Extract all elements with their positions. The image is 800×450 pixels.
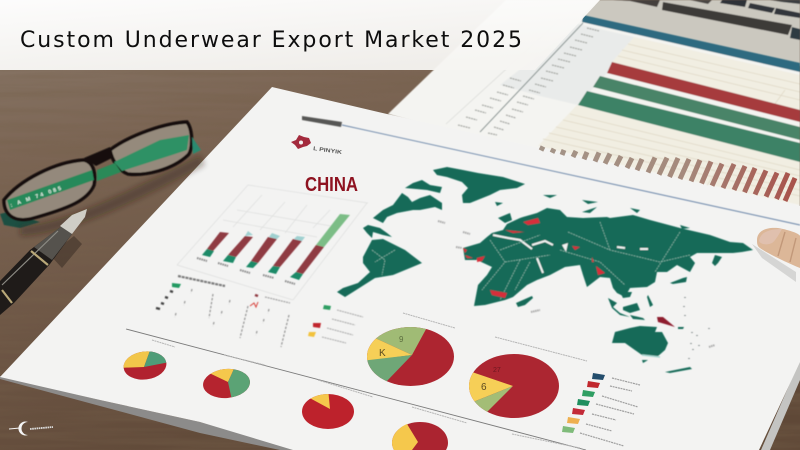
New Zealand <box>665 367 692 373</box>
section divider <box>126 329 586 450</box>
Arctic Canada <box>405 180 442 193</box>
pie captions <box>152 313 587 448</box>
company logo <box>291 135 342 156</box>
glasses <box>0 122 205 236</box>
title banner <box>0 0 600 70</box>
New Guinea highlight <box>657 317 675 327</box>
left lens <box>4 160 95 220</box>
hand: thumb holding page <box>752 228 800 282</box>
green bar upper <box>593 76 800 140</box>
row labels column <box>446 20 599 135</box>
Pacific islets <box>684 297 709 359</box>
pie chart F <box>469 354 559 418</box>
Eurasia and Africa <box>463 208 753 306</box>
data table <box>156 276 290 347</box>
slanted column chart <box>541 146 795 201</box>
pie chart A <box>124 351 166 380</box>
temple lettering: : A M 74 085 <box>10 185 64 209</box>
spreadsheet rule lines <box>543 44 800 196</box>
bridge <box>84 147 112 166</box>
heading: CHINA: CHINA <box>305 174 358 196</box>
bar 1 <box>202 232 229 257</box>
world map <box>337 167 753 373</box>
inland seas <box>493 235 648 273</box>
back sheet: spreadsheet report <box>388 0 800 230</box>
pie chart E: K <box>379 348 386 359</box>
front sheet shadow and page stack <box>0 360 800 450</box>
country borders <box>372 222 690 300</box>
green bar lower <box>578 91 800 162</box>
pie chart B <box>203 368 250 398</box>
company logo: L PINYIK <box>313 146 342 156</box>
pie legend <box>562 373 640 446</box>
red bar <box>607 62 800 122</box>
glasses shadow <box>20 155 205 236</box>
pen <box>0 209 87 315</box>
pie chart E: 9 <box>399 335 404 344</box>
title: Custom Underwear Export Market 2025 <box>20 28 522 53</box>
right lens <box>110 122 192 174</box>
pie chart F: 27 <box>493 367 501 374</box>
North America <box>373 193 442 223</box>
laptop keyboard <box>582 0 800 66</box>
highlighted export regions <box>463 218 605 298</box>
Australia <box>612 326 668 357</box>
islands <box>495 195 722 329</box>
green temple arm <box>7 170 94 210</box>
pie chart D <box>392 422 448 450</box>
watermark logo <box>9 422 53 436</box>
bar 5 <box>290 214 350 280</box>
Greenland <box>433 167 525 203</box>
pie chart E <box>367 327 454 386</box>
report header rule <box>302 116 800 225</box>
stacked bar chart <box>177 185 368 300</box>
map legend <box>308 305 363 343</box>
pie chart F: 6 <box>481 382 487 393</box>
bar axis labels <box>197 258 295 284</box>
bar 4 <box>268 236 305 274</box>
teal table header <box>582 15 800 72</box>
bar 2 <box>223 231 253 263</box>
South America <box>337 239 422 297</box>
Central America <box>363 225 392 238</box>
pie chart C <box>302 394 354 429</box>
bar 3 <box>246 233 280 268</box>
